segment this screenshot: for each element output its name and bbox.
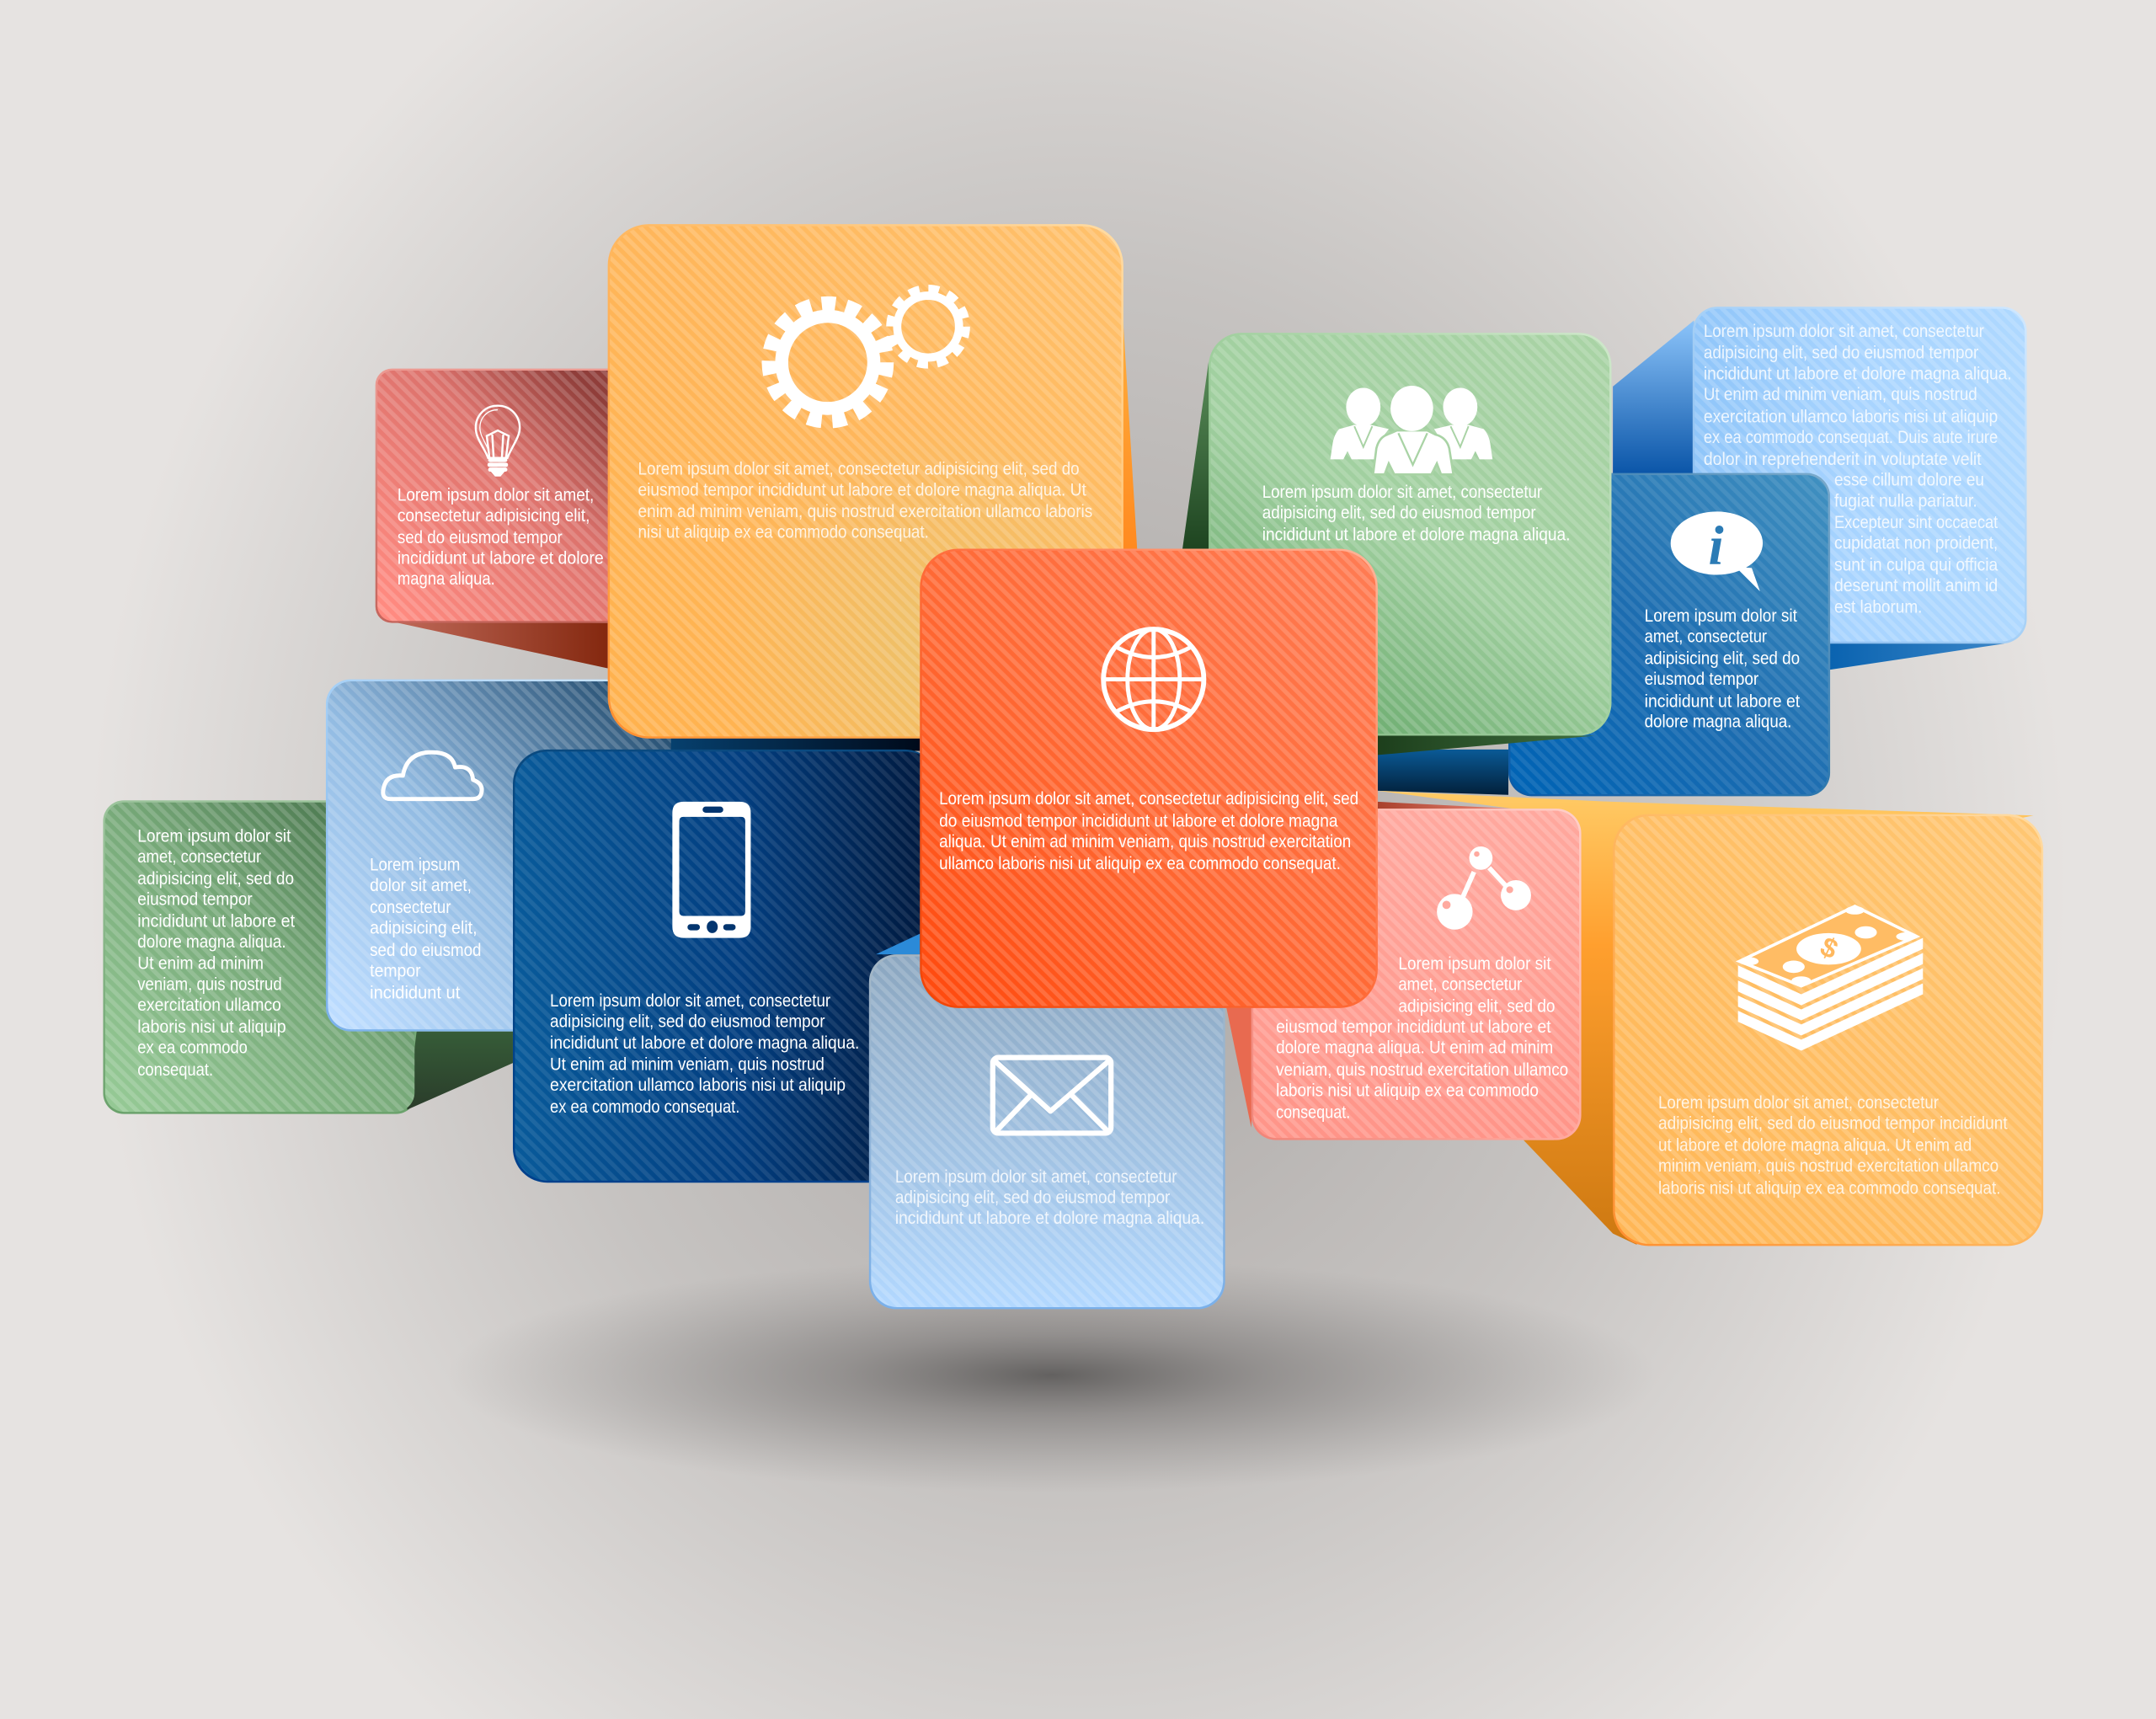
text block: blue info: adipisicing elit, sed do [1645,649,1800,669]
text block: big orange: eiusmod tempor incididunt ut labore et dolore magna aliqua. Ut [638,481,1086,500]
text block: light blue top right upper: adipisicing elit, sed do eiusmod tempor [1704,343,1978,362]
text block: central: do eiusmod tempor incididunt ut labore et dolore magna [939,811,1338,830]
text block: pink [1276,954,1568,1122]
text block: pink: amet, consectetur [1398,975,1522,995]
text block: light blue top right upper: ex ea commodo consequat. Duis aute irure [1704,428,1998,447]
text block: blue info: amet, consectetur [1645,627,1767,647]
icon: light bulb [476,406,520,477]
text block: light blue top right upper [1704,322,2012,469]
text block: big orange: Lorem ipsum dolor sit amet, consectetur adipisicing elit, sed do [638,459,1080,478]
text block: envelope: adipisicing elit, sed do eiusmod tempor [895,1188,1170,1208]
text block: pink: veniam, quis nostrud exercitation ullamco [1276,1060,1568,1080]
text block: light blue top right upper: Lorem ipsum dolor sit amet, consectetur [1704,322,1984,341]
text block: green team [1262,483,1570,545]
text block: central: ullamco laboris nisi ut aliquip ex ea commodo consequat. [939,854,1341,873]
text block: pink: Lorem ipsum dolor sit [1398,954,1551,974]
text block: big orange [638,459,1092,542]
icon: information speech bubble: i [1708,515,1724,576]
text block: red: incididunt ut labore et dolore [398,548,604,568]
text block: light blue top right upper: incididunt ut labore et dolore magna aliqua. [1704,365,2012,384]
text block: cloud: sed do eiusmod [370,941,481,960]
text block: light blue top right lower: sunt in culpa qui officia [1834,556,1998,575]
text block: light blue top right lower: est laborum. [1834,597,1922,617]
floor shadow [447,1258,1657,1492]
text block: red: magna aliqua. [398,569,495,589]
text block: blue info [1645,606,1800,732]
text block: left green: eiusmod tempor [137,889,253,909]
text block: central: Lorem ipsum dolor sit amet, consectetur adipisicing elit, sed [939,789,1358,809]
text block: light blue top right upper: Ut enim ad minim veniam, quis nostrud [1704,385,1977,404]
panel: big orange block with gears [608,224,1137,739]
text block: phone [550,991,859,1117]
text block: light blue top right lower: Excepteur sint occaecat [1834,513,1998,532]
icon: stack of money: $ [1816,930,1843,965]
text block: light blue top right lower: cupidatat non proident, [1834,533,1998,553]
panel: left green block [103,800,513,1114]
text block: red: consectetur adipisicing elit, [398,506,590,526]
text block: phone: exercitation ullamco laboris nisi ut aliquip [550,1076,846,1095]
text block: phone: Lorem ipsum dolor sit amet, consectetur [550,991,830,1011]
text block: orange money [1658,1093,2008,1198]
text block: left green: veniam, quis nostrud [137,975,282,995]
panel: red block with bulb [376,369,637,669]
text block: light blue top right lower: fugiat nulla pariatur. [1834,492,1977,511]
text block: left green: Ut enim ad minim [137,953,264,973]
text block: cloud: incididunt ut [370,983,460,1002]
text block: central: aliqua. Ut enim ad minim veniam, quis nostrud exercitation [939,832,1351,851]
panel: green block with team [1182,333,1611,755]
text block: orange money: ut labore et dolore magna aliqua. Ut enim ad [1658,1136,1972,1156]
icon: globe [1103,628,1203,730]
panel: dark blue block with phone [513,750,939,1182]
text block: light blue top right lower [1834,470,1998,617]
text block: left green: exercitation ullamco [137,996,281,1015]
text block: green team: incididunt ut labore et dolore magna aliqua. [1262,526,1570,545]
text block: left green: Lorem ipsum dolor sit [137,826,291,846]
text block: phone: ex ea commodo consequat. [550,1097,739,1117]
text block: cloud: tempor [370,961,421,980]
text block: blue info: eiusmod tempor [1645,670,1758,689]
text block: cloud [370,856,481,1002]
text block: envelope [895,1167,1204,1228]
text block: light blue top right lower: deserunt mollit anim id [1834,576,1998,595]
text block: big orange: enim ad minim veniam, quis nostrud exercitation ullamco laboris [638,502,1092,521]
text block: orange money: Lorem ipsum dolor sit amet, consectetur [1658,1093,1939,1113]
text block: blue info: dolore magna aliqua. [1645,713,1791,732]
text block: central [939,789,1358,873]
text block: blue info: Lorem ipsum dolor sit [1645,606,1797,626]
text block: pink: eiusmod tempor incididunt ut labore et [1276,1017,1551,1037]
panel: light blue top right block [1613,307,2027,670]
text block: left green: adipisicing elit, sed do [137,869,294,889]
text block: left green: incididunt ut labore et [137,912,295,932]
text block: blue info: incididunt ut labore et [1645,691,1800,711]
text block: left green: laboris nisi ut aliquip [137,1017,286,1037]
text block: cloud: Lorem ipsum [370,856,460,875]
text block: pink: dolore magna aliqua. Ut enim ad minim [1276,1038,1553,1058]
text block: left green: consequat. [137,1060,213,1080]
text block: orange money: minim veniam, quis nostrud exercitation ullamco [1658,1156,1999,1176]
panel: pink block with share icon [1226,802,1582,1140]
text block: phone: incididunt ut labore et dolore magna aliqua. [550,1033,859,1053]
text block: pink: consequat. [1276,1102,1350,1122]
text block: red: sed do eiusmod tempor [398,528,563,547]
icon: envelope [993,1058,1111,1133]
text block: envelope: Lorem ipsum dolor sit amet, consectetur [895,1167,1177,1187]
icon: team of three people [1331,386,1492,474]
icon: smartphone [672,802,750,938]
icon: two gears [769,289,966,421]
panel: light blue block with cloud [326,680,920,1032]
text block: green team: adipisicing elit, sed do eiusmod tempor [1262,504,1536,523]
text block: big orange: nisi ut aliquip ex ea commodo consequat. [638,522,929,542]
panel: blue info block [1378,473,1830,796]
panel: central orange-red block with globe [920,548,1378,1008]
text block: phone: Ut enim ad minim veniam, quis nostrud [550,1054,825,1074]
text block: left green: amet, consectetur [137,847,261,867]
text block: pink: laboris nisi ut aliquip ex ea commodo [1276,1081,1539,1100]
text block: green team: Lorem ipsum dolor sit amet, consectetur [1262,483,1542,502]
text block: left green: dolore magna aliqua. [137,932,286,952]
text block: orange money: adipisicing elit, sed do eiusmod tempor incididunt [1658,1114,2008,1134]
text block: left green: ex ea commodo [137,1038,248,1058]
panel: orange block with money [1613,814,2043,1246]
icon: share nodes [1437,846,1531,930]
text block: red [398,485,604,589]
text block: light blue top right upper: dolor in reprehenderit in voluptate velit [1704,450,1982,469]
text block: phone: adipisicing elit, sed do eiusmod tempor [550,1012,825,1032]
panel: orange side and top faces of the right block [1378,791,2034,1245]
text block: cloud: dolor sit amet, [370,876,472,895]
icon: cloud [383,752,482,799]
text block: pink: adipisicing elit, sed do [1398,997,1556,1017]
text block: red: Lorem ipsum dolor sit amet, [398,485,594,504]
text block: left green [137,826,295,1080]
text block: cloud: adipisicing elit, [370,919,478,938]
text block: cloud: consectetur [370,898,451,917]
text block: light blue top right lower: esse cillum dolore eu [1834,470,1984,489]
text block: orange money: laboris nisi ut aliquip ex ea commodo consequat. [1658,1178,2001,1198]
icon: stack of money [1738,906,1923,1050]
text block: envelope: incididunt ut labore et dolore magna aliqua. [895,1209,1204,1228]
icon: information speech bubble [1671,511,1763,591]
panel: light blue block with envelope [869,934,1225,1309]
text block: light blue top right upper: exercitation ullamco laboris nisi ut aliquip [1704,407,1998,426]
